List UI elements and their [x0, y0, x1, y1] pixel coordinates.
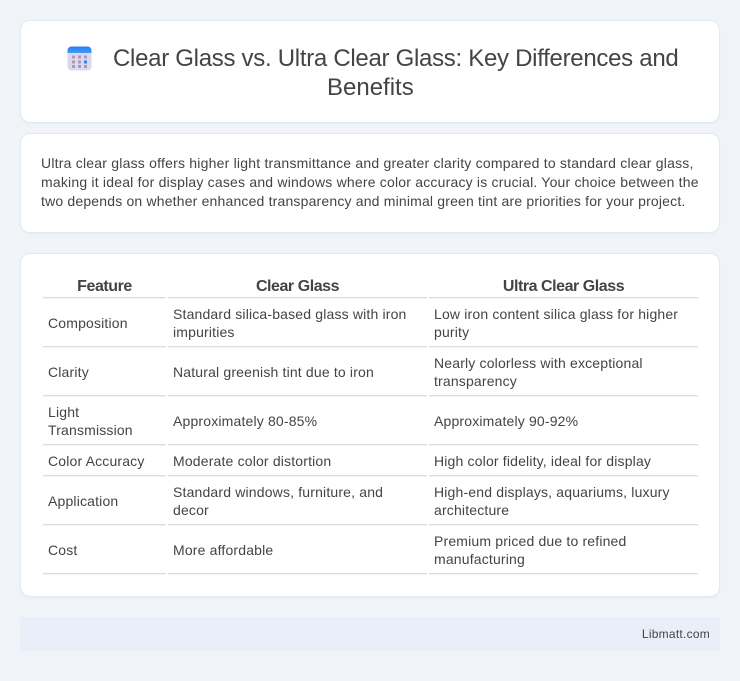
table header row: Clear Glass [256, 278, 339, 295]
panel: introduction text [20, 133, 720, 233]
row: color accuracy [43, 453, 698, 477]
row: composition: Composition [48, 315, 128, 331]
row: light transmission: Transmission [48, 422, 133, 438]
row: composition: purity [434, 324, 469, 340]
row: clarity: transparency [434, 373, 517, 389]
row: application: decor [173, 502, 209, 518]
row: clarity: Natural greenish tint due to iron [173, 364, 374, 380]
row: light transmission: Approximately 80-85% [173, 413, 317, 429]
row: light transmission: Approximately 90-92% [434, 413, 578, 429]
table header row: Ultra Clear Glass [503, 278, 624, 295]
row: color accuracy: Color Accuracy [48, 453, 145, 469]
row: composition: Low iron content silica glass for higher [434, 306, 678, 322]
intro paragraph [41, 155, 699, 209]
footer bar [20, 617, 720, 651]
intro paragraph: Ultra clear glass offers higher light transmittance and greater clarity compared to standard clear glass, [41, 155, 694, 171]
row: clarity: Nearly colorless with exceptional [434, 355, 643, 371]
panel: title header [20, 20, 720, 123]
row: color accuracy: Moderate color distortion [173, 453, 331, 469]
row: light transmission: Light [48, 404, 79, 420]
title [113, 45, 678, 101]
intro paragraph: two depends on whether enhanced transparency and minimal green tint are priorities for your project. [41, 193, 685, 209]
row: application: architecture [434, 502, 509, 518]
row: cost: Premium priced due to refined [434, 533, 626, 549]
row: composition: Standard silica-based glass with iron [173, 306, 407, 322]
panel: comparison table [20, 253, 720, 597]
row: cost: More affordable [173, 542, 273, 558]
title: Benefits [327, 74, 414, 101]
row: application [43, 484, 698, 526]
row: application: Standard windows, furniture, and [173, 484, 383, 500]
row: cost [43, 533, 698, 575]
row: application: Application [48, 493, 118, 509]
table header row: Feature [77, 278, 132, 295]
row: clarity [43, 355, 698, 397]
row: composition [43, 306, 698, 348]
row: cost: manufacturing [434, 551, 525, 567]
row: cost: Cost [48, 542, 77, 558]
row: color accuracy: High color fidelity, ideal for display [434, 453, 651, 469]
row: application: High-end displays, aquariums, luxury [434, 484, 670, 500]
icon: calendar [68, 46, 92, 70]
footer credit: Libmatt.com [642, 627, 710, 641]
intro paragraph: making it ideal for display cases and windows where color accuracy is crucial. Your choice between the [41, 174, 699, 190]
table header row [43, 278, 698, 299]
title: Clear Glass vs. Ultra Clear Glass: Key Differences and [113, 45, 678, 72]
row: composition: impurities [173, 324, 235, 340]
row: light transmission [43, 404, 698, 446]
row: clarity: Clarity [48, 364, 89, 380]
